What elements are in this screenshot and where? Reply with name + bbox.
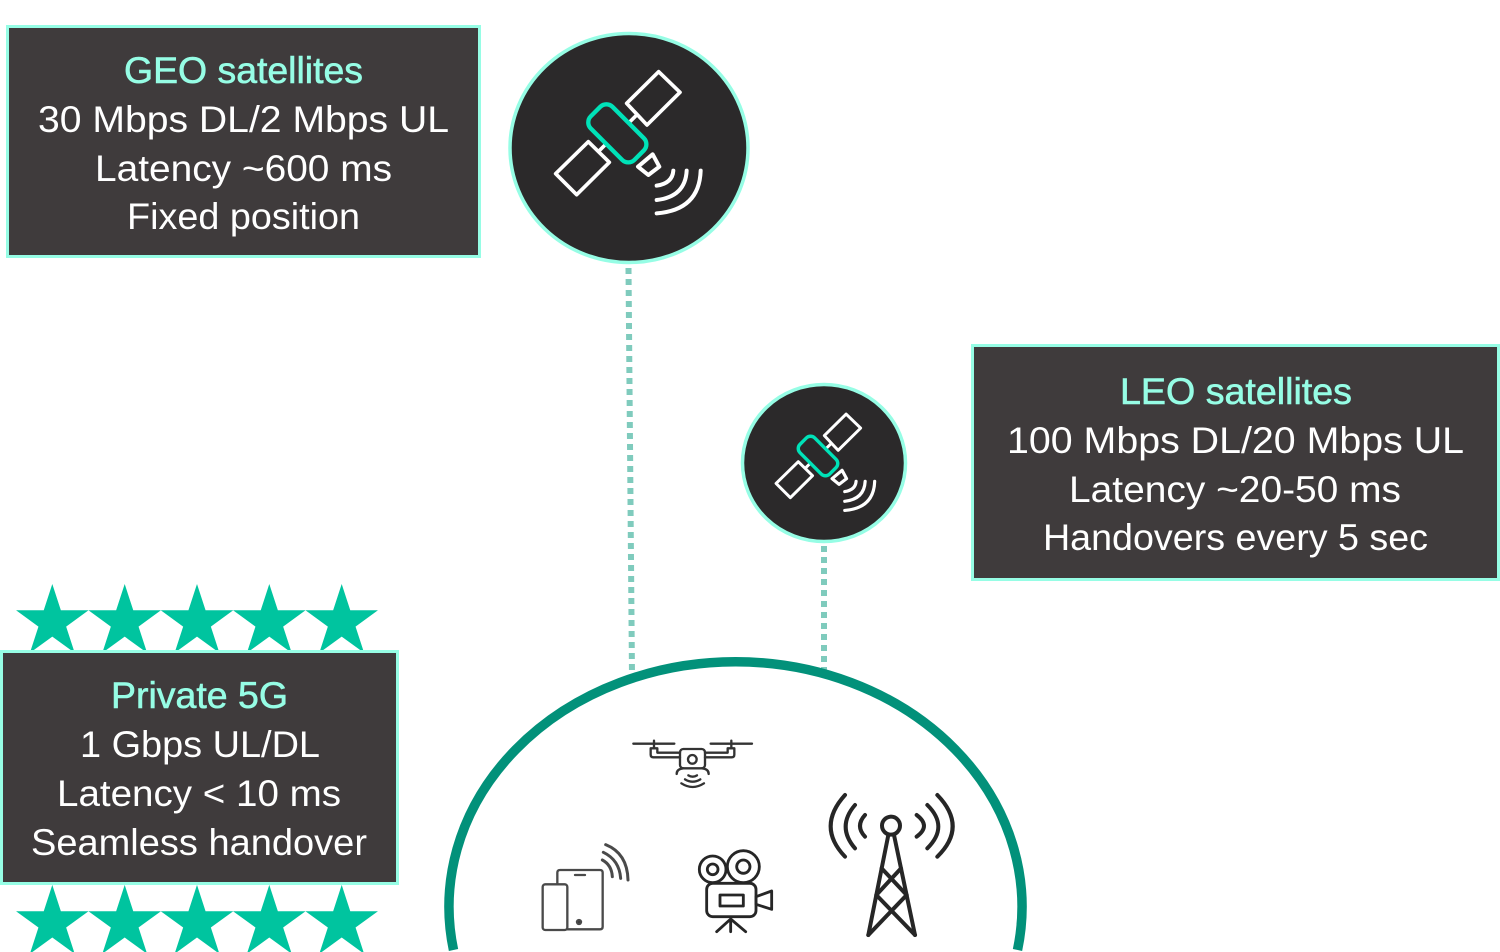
text: Private 5G throughput: 1 Gbps UL/DL (80, 724, 320, 765)
icon: LEO satellite (742, 384, 906, 542)
stars: bottom row (16, 885, 378, 952)
heading: Private 5G: Private 5G (111, 675, 288, 716)
text: LEO throughput: 100 Mbps DL/20 Mbps UL (1007, 420, 1464, 461)
connector: GEO satellite to dome (628, 268, 632, 676)
text: LEO handovers: Handovers every 5 sec (1043, 517, 1428, 558)
text: GEO throughput: 30 Mbps DL/2 Mbps UL (38, 99, 449, 140)
text: Private 5G handover: Seamless handover (31, 822, 367, 863)
connector: LEO satellite to dome (821, 546, 827, 670)
panel: GEO satellites (8, 26, 480, 256)
text: LEO latency: Latency ~20-50 ms (1069, 469, 1401, 510)
dome: coverage area (449, 662, 1022, 950)
heading: LEO satellites: LEO satellites (1120, 371, 1352, 412)
icon: GEO satellite (510, 34, 748, 262)
panel: LEO satellites (972, 346, 1498, 580)
heading: GEO satellites: GEO satellites (124, 50, 363, 91)
text: GEO position: Fixed position (127, 196, 360, 237)
text: GEO latency: Latency ~600 ms (95, 148, 392, 189)
text: Private 5G latency: Latency < 10 ms (57, 773, 341, 814)
panel: Private 5G (2, 652, 398, 884)
icon: cell tower (831, 795, 953, 935)
icon: video camera (699, 851, 772, 932)
icons inside dome (543, 741, 953, 935)
icon: tablet and phone (543, 845, 628, 930)
icon: drone (633, 741, 752, 787)
stars: top row (16, 584, 378, 653)
